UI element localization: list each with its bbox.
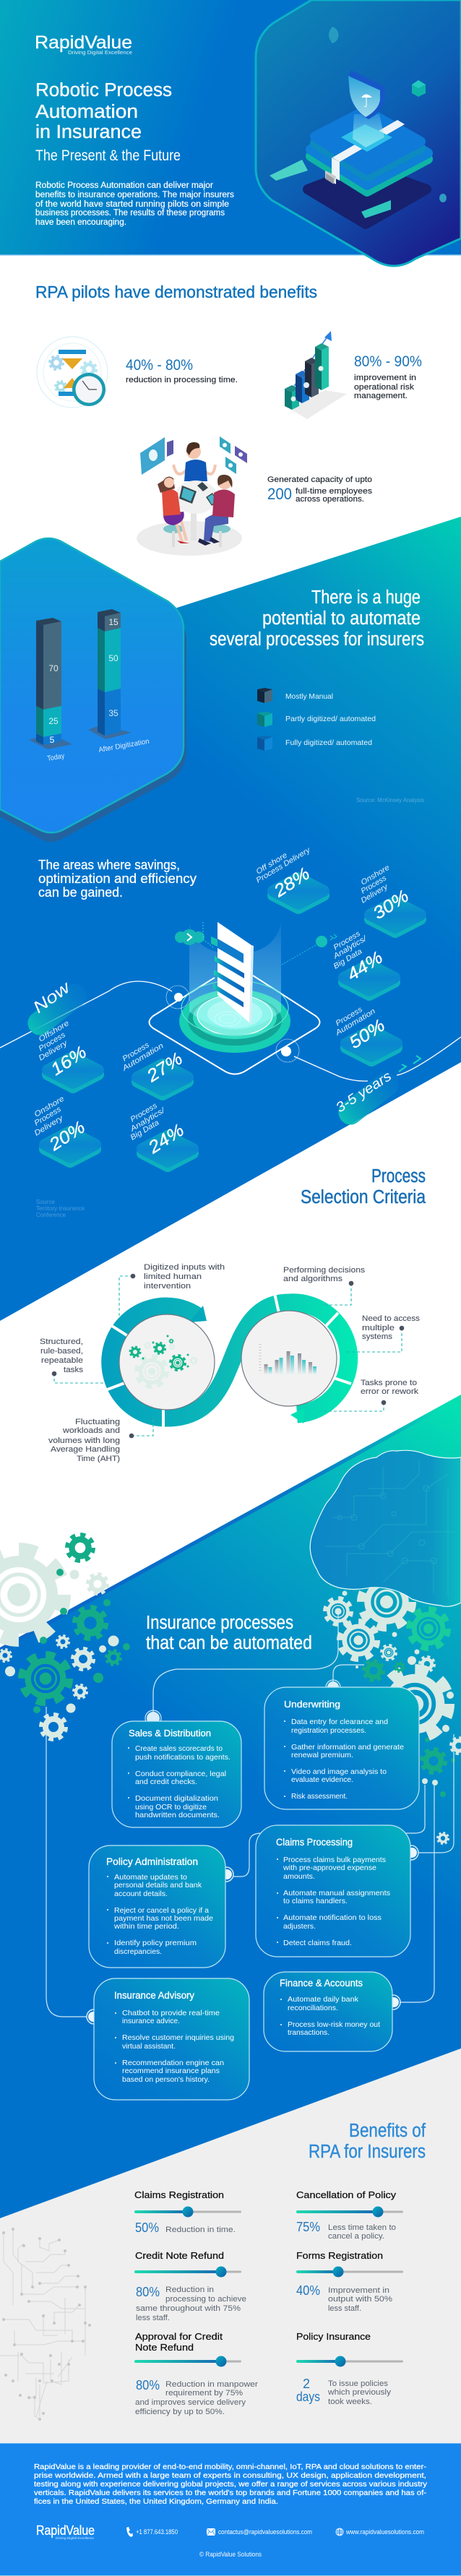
icon: shield with umbrella [348,70,385,119]
legend: Mostly Manual [285,692,333,701]
panel: sales and distribution: Document digitalization [135,1794,218,1803]
tile: off shore process delivery 28% [254,845,324,908]
legend: Fully digitized/ automated [285,738,372,747]
benefit: cancellation of policy [296,2189,403,2241]
contact: website: www.rapidvaluesolutions.com [345,2528,424,2536]
callouts: rule-based, [40,1347,83,1356]
tile: onshore process delivery 30%: Process [359,874,389,896]
stat: operational risk: improvement in [354,374,416,382]
benefit: forms registration: less staff. [328,2304,361,2313]
heading: potential to automate [262,608,421,629]
benefit: forms registration [296,2250,403,2313]
tile: onshore process delivery 20%: Onshore [33,1095,66,1119]
benefit: credit note refund [134,2250,246,2322]
tile: process analytics big data 24%: 24% [145,1121,188,1158]
tile: process analytics big data 24%: Analytics/ [128,1106,167,1134]
benefit: claims registration: Claims Registration [134,2189,224,2200]
illustration: team around table [137,436,247,556]
tile: offshore process delivery 16% [37,1019,98,1087]
hexagon chart backdrop [0,538,186,842]
tile: offshore process delivery 16%: Delivery [37,1038,69,1063]
heading: several processes for insurers [210,629,424,650]
benefit: policy insurance: Policy Insurance [296,2331,371,2342]
benefit: approval for credit note refund: Note Refund [135,2342,194,2353]
about text: verticals. RapidValue delivers its services to the world's top brands and Fortune 1000 companies and has of- [34,2489,427,2497]
tile: onshore process delivery 30%: Onshore [359,863,391,887]
icon: rising isometric bars [285,331,347,419]
callouts: Tasks prone to [361,1379,417,1387]
panel: underwriting: renewal premium. [291,1751,353,1759]
title [35,80,172,142]
benefit: cancellation of policy: Cancellation of Policy [296,2189,397,2200]
callouts: and algorithms [283,1275,343,1283]
panel: underwriting: Data entry for clearance and [291,1718,388,1726]
heading [146,1613,312,1653]
panel: underwriting: evaluate evidence. [291,1775,353,1784]
copyright: © RapidValue Solutions [199,2551,262,2558]
tile: onshore process delivery 20% [33,1095,95,1162]
bar: After Digitization: 50 [108,653,119,663]
panel: insurance advisory: recommend insurance plans [122,2067,220,2075]
illustration: fingerprint scanner with document [149,922,337,1074]
benefit: approval for credit note refund: Approval for Credit [135,2331,223,2342]
panel: sales and distribution: Create sales scorecards to [135,1744,223,1753]
stat: operational risk: operational risk [354,383,415,392]
panel: claims processing: with pre-approved expense [283,1864,376,1872]
panel: savings areas [0,845,461,1218]
hexagon backdrop [256,0,461,266]
panel: underwriting: registration processes. [291,1726,366,1735]
panel: claims processing: amounts. [283,1872,315,1881]
tile: process automation 50% [333,1005,397,1061]
panel: sales and distribution: and credit checks. [135,1778,197,1786]
benefit: approval for credit note refund: requirement by 75% [165,2389,243,2398]
tile: offshore process delivery 16%: Offshore [37,1019,71,1044]
logo: Driving Digital Excellence [68,49,132,56]
bar: After Digitization [88,609,150,754]
panel: underwriting: Underwriting [284,1699,340,1710]
panel: underwriting: Video and image analysis to [291,1767,387,1776]
tile: process automation 27%: Process [121,1041,151,1064]
pill: 3-5 years: 3-5 years [333,1069,395,1116]
panel: underwriting: Gather information and generate [291,1743,404,1752]
panel: process selection criteria [40,1166,426,1463]
heading: optimization and efficiency [38,871,197,886]
stat: operational risk [354,353,422,400]
tile: onshore process delivery 20%: Process [33,1105,63,1128]
heading: The areas where savings, [38,858,180,872]
gears: right cluster [325,1591,461,1844]
panel: claims processing: adjusters. [283,1922,316,1931]
panel: claims processing: to claims handlers. [283,1897,348,1905]
callouts: multiple [362,1324,395,1332]
intro text [35,181,234,227]
pill: 3-5 years [333,1056,421,1129]
callouts: volumes with long [48,1436,120,1445]
brain cloud with circuit lines [310,1450,461,1606]
heading: Process [371,1166,426,1186]
benefit: cancellation of policy: Less time taken to [328,2223,396,2232]
benefit: credit note refund: less staff. [136,2314,170,2322]
panel: policy administration [89,1845,225,1968]
timeline road lines [0,981,461,1081]
panel: benefits of RPA for insurers [0,2049,461,2443]
panel: insurance advisory: virtual assistant. [122,2042,176,2051]
benefit: policy insurance: To issue policies [328,2379,389,2388]
title: Robotic Process [35,80,172,100]
callouts: Average Handling [51,1445,120,1454]
callouts: Time (AHT) [77,1455,120,1463]
callouts: repeatable [41,1356,83,1365]
benefit: approval for credit note refund: 80% [136,2378,160,2392]
benefit: policy insurance [296,2331,403,2406]
heading: can be gained. [38,885,123,900]
stat: processing time: reduction in processing time. [126,376,238,384]
benefit: approval for credit note refund: Reduction in manpower [165,2380,258,2389]
heading: that can be automated [146,1633,312,1653]
tile: onshore process delivery 30%: Delivery [359,882,389,905]
heading [301,1166,426,1207]
stat: capacity: full-time employees [296,487,373,496]
callouts: workloads and [62,1426,120,1435]
panel: insurance advisory: Insurance Advisory [114,1990,194,2001]
tile: process automation 27% [120,1041,188,1095]
panel: finance and accounts: reconciliations. [288,2004,338,2012]
benefit: claims registration: 50% [135,2220,159,2235]
pill: Now: Now [30,977,74,1017]
title: Automation [35,102,138,122]
heading: Selection Criteria [301,1187,426,1207]
benefit: credit note refund: processing to achieve [165,2295,246,2304]
benefit: forms registration: 40% [296,2283,320,2298]
benefit: approval for credit note refund: efficiency by up to 50%. [135,2408,225,2416]
callouts: intervention [144,1282,191,1291]
panel: underwriting: Risk assessment. [291,1792,348,1801]
heading: RPA for Insurers [309,2142,426,2162]
callouts: limited human [144,1272,202,1281]
benefit: claims registration [134,2189,241,2235]
callouts: Fluctuating [75,1418,120,1426]
panel: finance and accounts: Finance & Accounts [280,1978,363,1989]
tile: off shore process delivery 28%: Off shore [254,850,289,876]
panel: sales and distribution: push notifications to agents. [135,1753,231,1762]
heading: Insurance processes [146,1613,293,1633]
stat: processing time [126,357,238,384]
benefit: credit note refund: same throughout with 75% [136,2304,241,2313]
source note [36,1198,85,1218]
decorative floating shapes [329,27,447,202]
decorative circuit brain [0,2228,91,2421]
tile: onshore process delivery 20%: Delivery [33,1113,65,1138]
callouts: tasks [64,1366,84,1374]
bar: Today [29,618,72,763]
panel: finance and accounts: Process low-risk money out [288,2020,380,2029]
panel: sales and distribution [112,1721,241,1827]
intro text: Robotic Process Automation can deliver major [35,181,213,190]
about text [34,2463,428,2506]
tile: onshore process delivery 30% [359,863,421,932]
bar: After Digitization: 15 [108,617,119,627]
bar: After Digitization: 35 [108,708,119,718]
benefit: forms registration: Forms Registration [296,2250,383,2261]
tile: onshore process delivery 20%: 20% [46,1118,89,1155]
tile: onshore process delivery 30%: 30% [370,887,413,923]
contact: email: contactus@rapidvaluesolutions.com [218,2528,312,2536]
panel: finance and accounts [264,1972,392,2051]
tile: process analytics big data 44%: Process [332,929,362,952]
panel: insurance processes background [0,1395,461,2218]
panel: claims processing: Process claims bulk payments [283,1856,386,1864]
panel: claims processing: Automate notification to loss [283,1913,382,1922]
subtitle: The Present & the Future [35,147,181,164]
panel: automation potential chart [0,538,424,842]
heading [210,587,424,650]
bar: Today: Today [47,752,65,763]
footer logo: RapidValue [36,2523,95,2538]
tile: process automation 50%: Process [334,1005,364,1028]
heading: There is a huge [311,587,421,608]
connector nodes [87,1680,418,2024]
pill: Now [23,977,91,1040]
chart: infinity loop [105,1293,351,1428]
contact: phone: +1 877.643.1850 [136,2528,178,2536]
stat: capacity [267,475,373,504]
benefit: policy insurance: took weeks. [328,2398,372,2406]
bar: Today: 5 [50,735,55,745]
about text: prise worldwide. Armed with a large team of experts in consulting, UX design, application development, [34,2471,426,2480]
about text: fices in the United States, the United Kingdom, Germany and India. [34,2497,278,2506]
benefit: credit note refund: Credit Note Refund [135,2250,224,2261]
benefit: cancellation of policy: cancel a policy. [328,2232,384,2241]
tile: process analytics big data 44%: Big Data [332,947,363,971]
left circle with gears [119,1314,215,1410]
tile: process analytics big data 24% [128,1101,193,1166]
panel: claims processing [256,1825,410,1957]
intro text: have been encouraging. [35,218,126,227]
benefit: policy insurance: which previously [327,2388,392,2397]
callouts: systems [362,1332,393,1341]
panel: insurance advisory [94,1978,249,2100]
about text: RapidValue is a leading provider of end-to-end mobility, omni-channel, IoT, RPA and cloud solutions to enter- [34,2463,427,2471]
source note: Conference [36,1211,66,1218]
tile: process analytics big data 44%: Analytics/ [331,934,369,961]
panel: policy administration: Reject or cancel a policy if a [114,1906,209,1915]
stat: capacity: Generated capacity of upto [267,475,372,484]
document [211,922,254,1025]
callouts: Structured, [40,1337,83,1346]
intro text: of the world have started running pilots on simple [35,200,229,209]
gears: left cluster [0,1535,130,1739]
stat: operational risk: 80% - 90% [354,353,422,370]
callouts: Digitized inputs with [144,1263,225,1272]
legend [257,688,376,751]
panel: insurance advisory: Recommendation engine can [122,2059,224,2067]
icon: isometric insurance platform with shield [270,70,428,224]
heading: RPA pilots have demonstrated benefits [35,283,317,301]
callouts [40,1263,421,1463]
panel: policy administration: discrepancies. [114,1947,162,1956]
panel: insurance advisory: insurance advice. [122,2017,180,2025]
benefit: approval for credit note refund [134,2331,258,2416]
source note: Territory Insurance [36,1205,85,1212]
panel: insurance advisory: Chatbot to provide real-time [122,2009,220,2017]
panel: footer [0,2443,461,2576]
panel: policy administration: within time period. [113,1922,179,1931]
panel: claims processing: Automate manual assignments [283,1889,390,1897]
tile: process analytics big data 44% [331,929,395,995]
stat: capacity: across operations. [296,495,364,504]
panel: finance and accounts: transactions. [288,2028,329,2037]
panel: sales and distribution: Sales & Distribution [129,1728,211,1739]
tile: offshore process delivery 16%: 16% [48,1043,90,1080]
benefit: forms registration: Improvement in [328,2286,389,2295]
icon: hourglass and clock [37,337,108,408]
intro text: business processes. The results of these programs [35,209,225,217]
tile: process automation 50%: Automation [333,1007,377,1038]
heading [38,858,197,900]
panel: policy administration: Identify policy premium [114,1939,197,1947]
footer logo: Driving Digital Excellence [56,2536,95,2540]
tile: process analytics big data 24%: Process [129,1101,159,1124]
panel: policy administration: personal details and bank [114,1881,202,1890]
callouts: Performing decisions [283,1266,366,1275]
stat: operational risk: management. [354,392,408,400]
panel: RPA pilot benefits [35,283,422,556]
benefit: policy insurance: days [296,2390,320,2404]
tile: process automation 27%: Automation [120,1041,165,1073]
benefit: credit note refund: Reduction in [165,2286,214,2294]
tile: process automation 50%: 50% [346,1016,389,1053]
tile: process automation 27%: 27% [143,1049,186,1087]
stat: capacity: 200 [267,485,292,503]
benefit: claims registration: Reduction in time. [165,2226,236,2234]
panel: policy administration: Automate updates to [114,1873,187,1882]
tile: offshore process delivery 16%: Process [37,1030,67,1054]
callouts: Need to access [362,1314,421,1323]
bar: After Digitization: After Digitization [98,738,150,754]
connector node [166,986,299,1062]
source note: Source: McKinsey Analysis [356,796,424,804]
gears: upper right behind cloud [361,1577,412,1627]
panel: automation potential and savings areas background [0,517,461,1321]
about text: testing along with experience delivering global projects, we offer a range of services across various industry [34,2480,428,2489]
panel: claims processing: Detect claims fraud. [283,1939,352,1947]
tile: off shore process delivery 28%: Process Delivery [254,845,312,885]
stat: processing time: 40% - 80% [126,357,193,374]
connector lines [46,1611,454,2017]
benefit: policy insurance: 2 [303,2377,310,2391]
legend: Partly digitized/ automated [285,715,376,723]
benefit: forms registration: output with 50% [328,2295,392,2304]
panel: sales and distribution: using OCR to digitize [135,1803,207,1812]
logo: RapidValue [35,33,132,53]
panel: underwriting [264,1687,419,1809]
tile: off shore process delivery 28%: 28% [270,864,314,902]
tile: process analytics big data 24%: Big Data [129,1119,160,1142]
callouts: error or rework [361,1387,419,1396]
panel: sales and distribution: handwritten documents. [135,1811,220,1819]
bar: Today: 25 [48,716,59,726]
bar: Today: 70 [48,663,59,673]
panel: finance and accounts: Automate daily bank [288,1995,359,2004]
benefit: credit note refund: 80% [136,2285,160,2299]
panel: policy administration: account details. [114,1890,168,1898]
intro text: benefits to insurance operations. The major insurers [35,191,234,199]
panel: insurance advisory: Resolve customer inquiries using [122,2033,234,2042]
heading: Benefits of [349,2121,426,2141]
panel: claims processing: Claims Processing [276,1837,353,1848]
tile: process analytics big data 44%: 44% [344,948,387,985]
source note: Source [36,1198,55,1205]
panel: sales and distribution: Conduct compliance, legal [135,1770,226,1778]
panel: insurance processes [0,1397,461,2100]
title: in Insurance [35,122,142,142]
benefit: cancellation of policy: 75% [296,2220,320,2234]
contact: phone [126,2527,178,2537]
panel: insurance advisory: based on person's history. [122,2075,210,2084]
panel: policy administration: Policy Administration [106,1856,198,1867]
panel: policy administration: payment has not been made [114,1914,213,1923]
heading [309,2121,426,2162]
right circle with bar chart [241,1311,337,1406]
benefit: approval for credit note refund: and improves service delivery [135,2398,246,2407]
panel: hero header [0,0,461,266]
